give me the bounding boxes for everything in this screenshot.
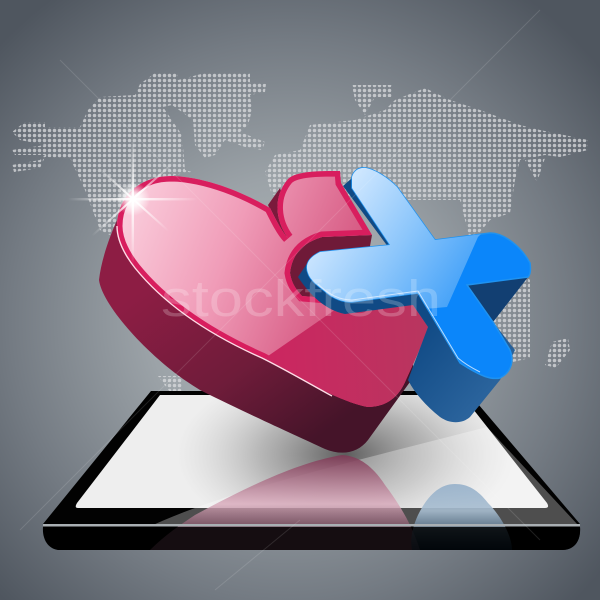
heart lobe wedge [268, 188, 300, 242]
dark lower reflection fade [45, 527, 580, 550]
tablet [43, 391, 580, 550]
cross top face [307, 168, 530, 378]
cross light glossy area [306, 168, 481, 309]
heart top face [117, 171, 428, 407]
heart highlight edge [117, 226, 332, 396]
cross [295, 150, 530, 422]
heart reflection [150, 455, 420, 550]
heart shadow on screen [76, 395, 548, 508]
sparkle glow [116, 182, 150, 216]
tablet black bezel [43, 391, 580, 527]
watermark text: stockfresh [161, 270, 441, 327]
heart [99, 171, 440, 453]
screen glare band [153, 427, 578, 525]
heart crimson rim [117, 171, 428, 407]
cross white edge [318, 284, 480, 372]
cross side wall [298, 178, 528, 422]
sparkle rays [68, 198, 198, 200]
heart lower crimson face [265, 305, 428, 407]
dotted world map [12, 74, 588, 391]
tablet screen [76, 395, 548, 508]
heart side wall [99, 218, 415, 453]
heart inner notch wall [288, 235, 372, 302]
cross dark inner wall [467, 277, 528, 322]
sparkle [68, 134, 198, 264]
tablet silver edge [43, 524, 580, 526]
cross reflection [411, 484, 512, 550]
tablet body base [43, 527, 580, 550]
